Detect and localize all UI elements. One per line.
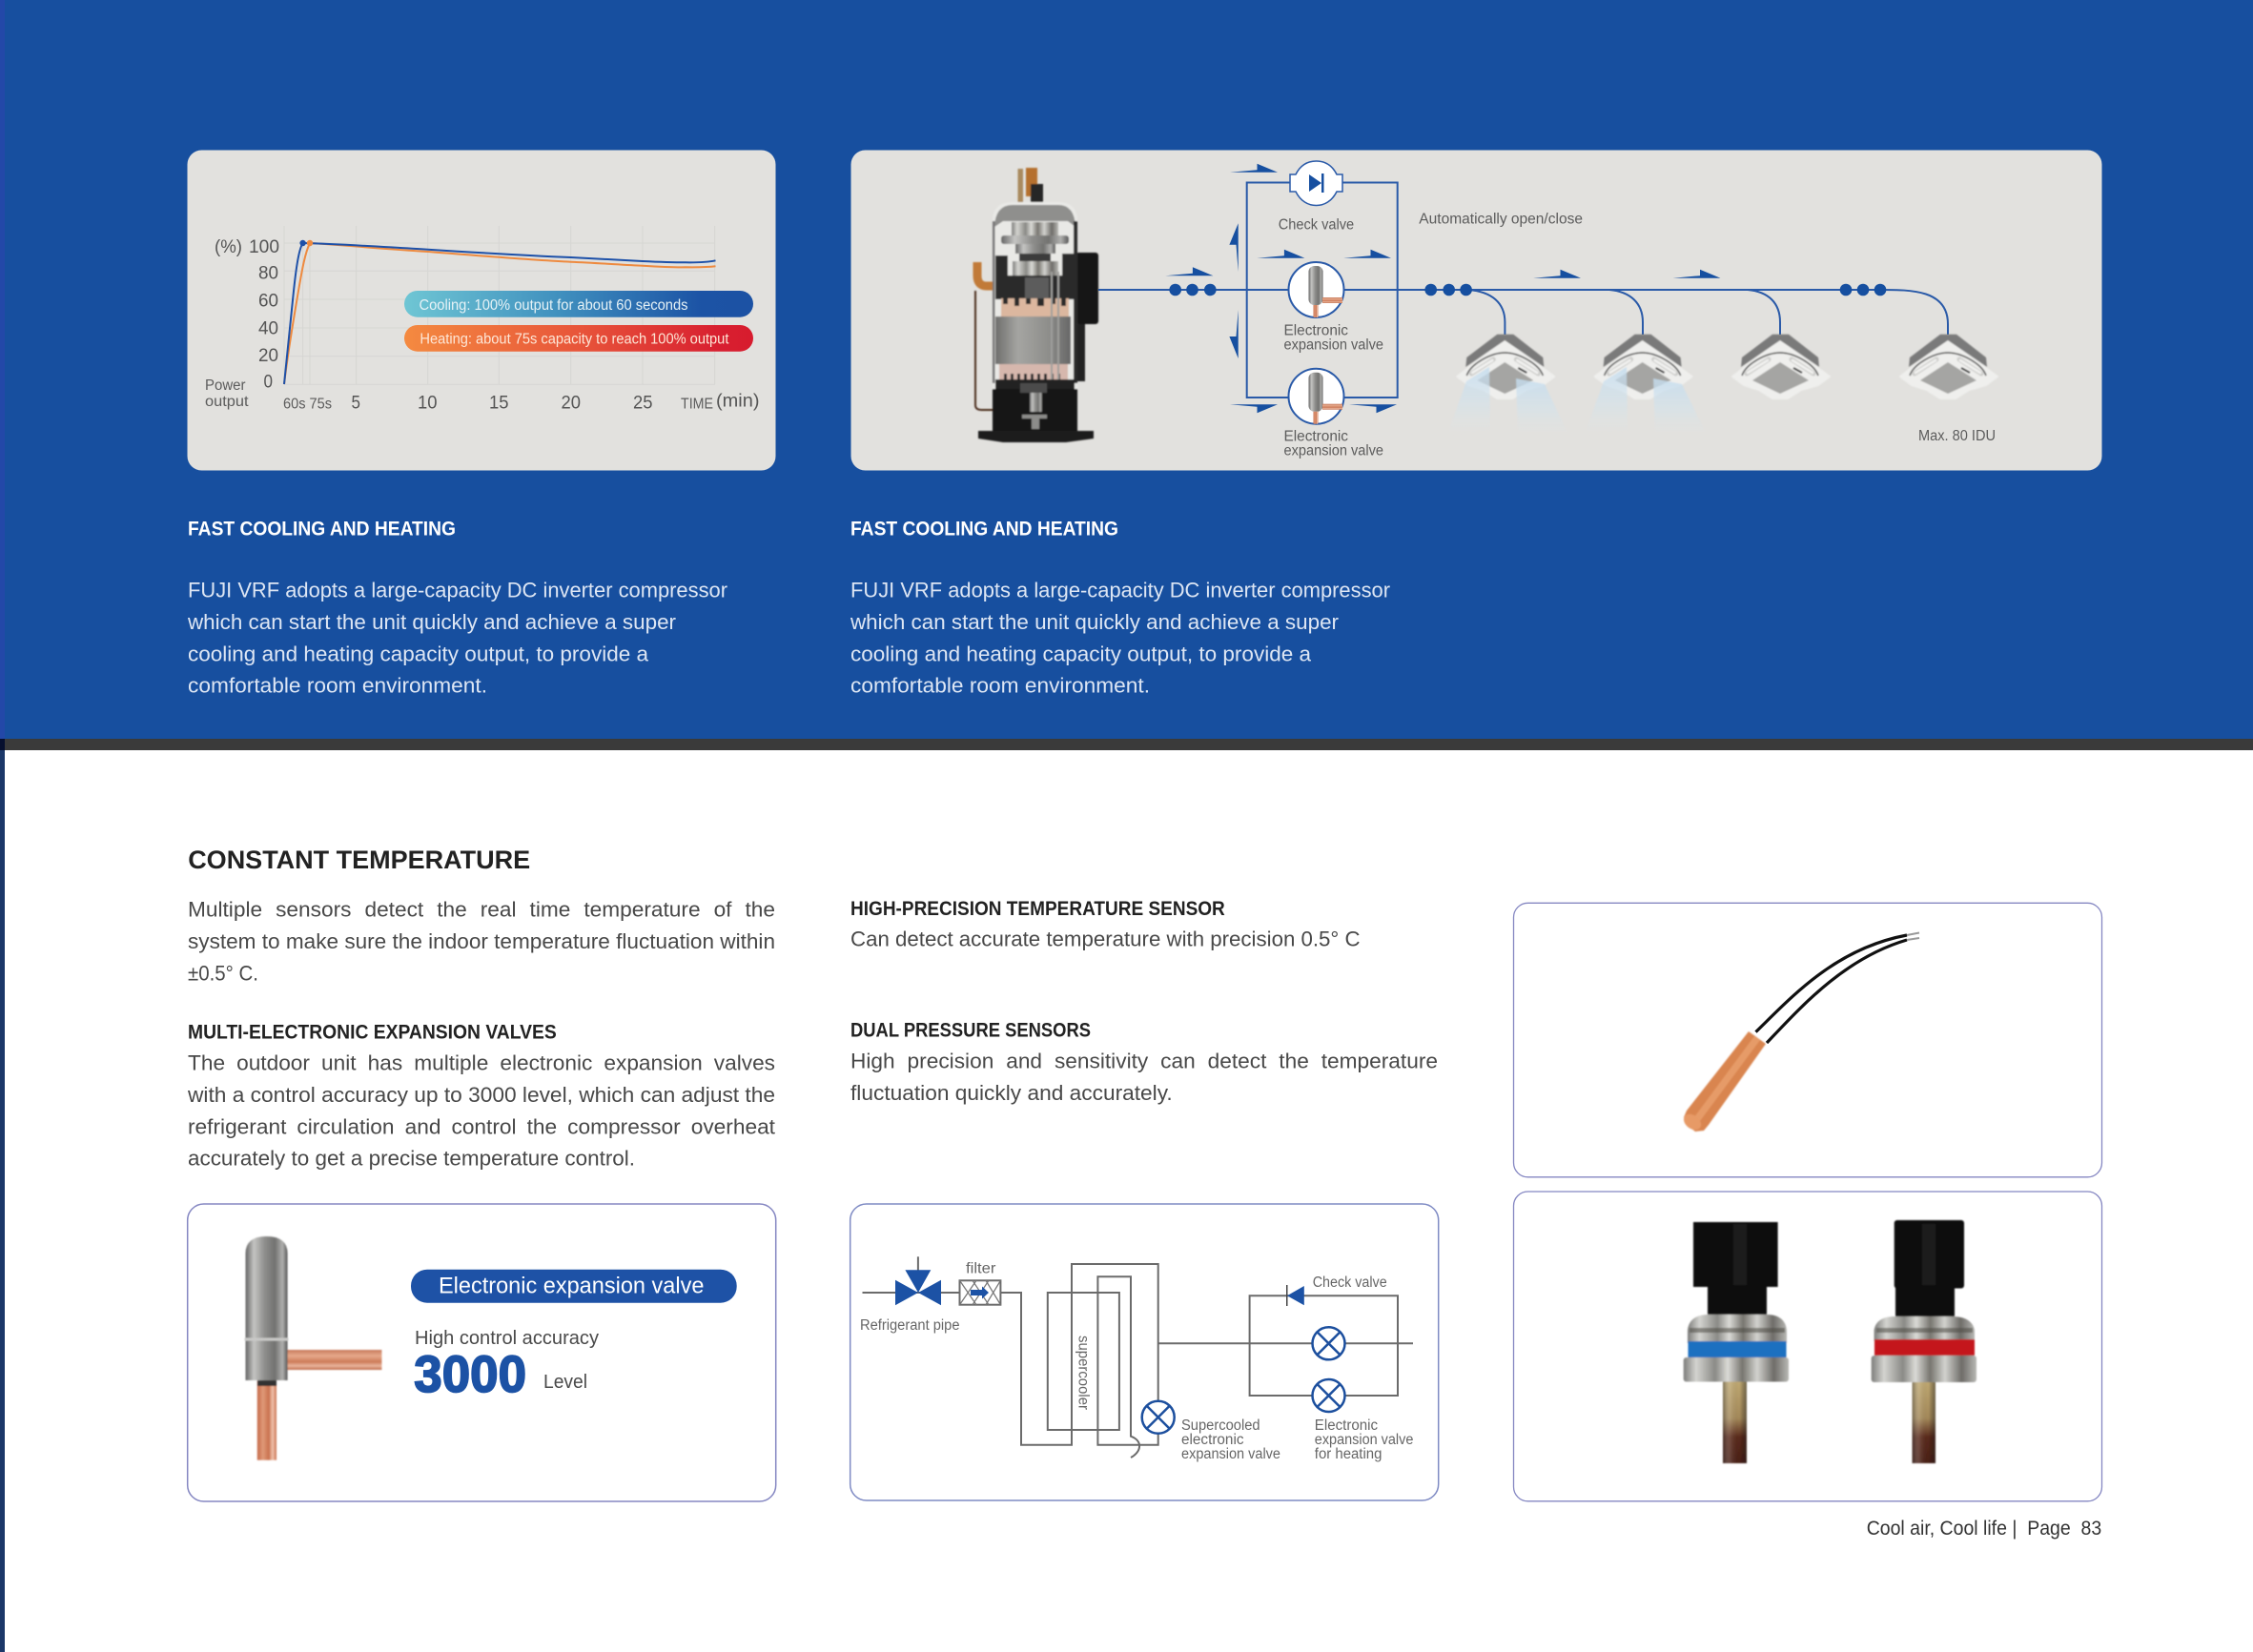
indoor unit 4	[1900, 335, 1997, 398]
text block: multi-electronic expansion valves	[187, 1021, 775, 1171]
y axis labels: 80	[258, 264, 278, 284]
axis title: power output	[205, 377, 249, 410]
icon: filter	[959, 1280, 1000, 1305]
text block: fast cooling left	[187, 519, 727, 698]
refrigerant circuit box	[1247, 183, 1398, 398]
legend: heating: Heating: about 75s capacity to reach 100% output	[420, 332, 729, 348]
text block: fast cooling left: comfortable room environment.	[188, 674, 487, 698]
x axis labels: 5	[351, 393, 360, 413]
background: blue section	[0, 0, 2253, 739]
x axis labels: (min)	[716, 391, 759, 412]
text block: fast cooling left: FUJI VRF adopts a large-capacity DC inverter compressor	[188, 579, 727, 602]
indoor unit 1	[1457, 335, 1554, 398]
accuracy text	[414, 1327, 600, 1403]
icon: electronic expansion valve upper	[1289, 262, 1344, 317]
x axis labels: 60s 75s	[283, 396, 332, 412]
panel: refrigerant schematic	[850, 1204, 1439, 1500]
diagram labels: expansion valve	[1283, 337, 1383, 354]
y axis labels: 0	[263, 373, 273, 393]
valve photo	[244, 1236, 381, 1460]
schematic labels: supercooler	[1075, 1336, 1091, 1410]
left edge strip	[0, 0, 5, 1652]
label pill: Electronic expansion valve	[439, 1274, 704, 1299]
schematic labels: expansion valve	[1315, 1432, 1413, 1448]
legend: cooling: Cooling: 100% output for about 60 seconds	[420, 297, 688, 314]
text block: fast cooling right: FAST COOLING AND HEATING	[850, 519, 1118, 540]
x axis labels: TIME	[681, 396, 713, 412]
y axis labels: (%)	[215, 237, 242, 257]
footer: page number: Cool air, Cool life | Page 83	[1867, 1518, 2101, 1540]
x axis labels: 15	[489, 393, 509, 413]
low-pressure sensor, blue band	[1684, 1222, 1789, 1463]
heating curve	[284, 243, 715, 384]
text block: fast cooling right: FUJI VRF adopts a large-capacity DC inverter compressor	[850, 579, 1390, 602]
legend: heating	[404, 325, 753, 352]
sensor wires	[1756, 935, 1907, 1043]
icon: check valve	[1286, 1285, 1304, 1306]
text block: fast cooling left: FAST COOLING AND HEATING	[188, 519, 456, 540]
schematic labels: Electronic	[1315, 1417, 1378, 1434]
text block: constant temperature intro	[188, 898, 775, 985]
panel: compressor and indoor units diagram	[850, 151, 2101, 471]
airflow from indoor units	[1447, 367, 1707, 435]
panel: power output chart	[187, 151, 776, 471]
y axis labels: 60	[258, 292, 278, 312]
peak markers	[299, 240, 313, 246]
schematic labels: for heating	[1315, 1446, 1382, 1462]
diagram labels	[1279, 211, 1996, 459]
text block: high-precision temperature sensor: Can detect accurate temperature with precision 0.5° C	[850, 928, 1361, 951]
text block: multi-electronic expansion valves: refrigerant circulation and control the compressor overheat	[188, 1114, 775, 1138]
x axis labels: 25	[633, 393, 652, 413]
branch pipes	[1468, 290, 1780, 335]
main pipe	[1098, 290, 1948, 335]
indoor unit 2	[1595, 335, 1692, 398]
x axis labels: 10	[418, 393, 437, 413]
text block: multi-electronic expansion valves: The outdoor unit has multiple electronic expansion valves	[188, 1051, 775, 1075]
text block: fast cooling right: cooling and heating capacity output, to provide a	[850, 642, 1312, 665]
text block: multi-electronic expansion valves: with a control accuracy up to 3000 level, which can adjust the	[187, 1083, 775, 1107]
text block: constant temperature intro: system to make sure the indoor temperature fluctuation within	[188, 929, 775, 953]
diagram labels: Automatically open/close	[1419, 211, 1583, 227]
diagram labels: Electronic	[1283, 323, 1348, 339]
x axis labels	[283, 391, 759, 413]
text block: high-precision temperature sensor: HIGH-PRECISION TEMPERATURE SENSOR	[850, 898, 1225, 920]
icon: three-way valve	[895, 1270, 941, 1305]
diagram labels: expansion valve	[1283, 442, 1383, 459]
compressor cutaway	[975, 168, 1098, 442]
text block: constant temperature intro: ±0.5° C.	[188, 961, 258, 985]
accuracy text: 3000	[414, 1346, 526, 1403]
icon: supercooled expansion valve	[1142, 1401, 1175, 1434]
axis title: power output: Power	[205, 377, 246, 394]
diagram labels: Check valve	[1279, 217, 1354, 234]
panel: pressure sensors	[1514, 1192, 2101, 1501]
axis title: power output: output	[205, 394, 249, 410]
icon: electronic expansion valve lower	[1289, 369, 1344, 424]
text block: dual pressure sensors: fluctuation quickly and accurately.	[850, 1081, 1173, 1105]
text block: multi-electronic expansion valves: MULTI-ELECTRONIC EXPANSION VALVES	[188, 1021, 557, 1043]
pipes	[862, 1256, 1413, 1458]
copper probe	[1681, 1031, 1766, 1133]
schematic labels: Refrigerant pipe	[860, 1317, 959, 1334]
y axis labels: 40	[258, 319, 278, 339]
icon: check valve	[1290, 161, 1342, 206]
wire tips	[1907, 932, 1919, 940]
text block: fast cooling left: which can start the unit quickly and achieve a super	[187, 610, 676, 634]
legend: cooling	[404, 291, 753, 317]
text block: constant temperature intro: Multiple sensors detect the real time temperature of the	[188, 898, 775, 922]
icon: expansion valve upper	[1312, 1327, 1344, 1359]
schematic labels: electronic	[1181, 1432, 1244, 1448]
schematic labels: filter	[966, 1261, 995, 1277]
title: constant temperature: CONSTANT TEMPERATURE	[188, 846, 530, 874]
text block: multi-electronic expansion valves: accurately to get a precise temperature control.	[188, 1147, 635, 1171]
schematic labels: expansion valve	[1181, 1446, 1280, 1462]
divider band	[0, 739, 2253, 750]
label pill	[411, 1270, 737, 1303]
text block: fast cooling left: cooling and heating capacity output, to provide a	[188, 642, 649, 665]
y axis labels	[215, 237, 279, 393]
panel: temperature sensor	[1514, 903, 2101, 1177]
diagram labels: Max. 80 IDU	[1918, 428, 1996, 444]
y axis labels: 100	[249, 237, 279, 257]
x axis labels: 20	[561, 393, 581, 413]
diagram labels: Electronic	[1283, 429, 1348, 445]
schematic labels: Check valve	[1313, 1275, 1387, 1291]
high-pressure sensor, red band	[1872, 1220, 1976, 1463]
text block: fast cooling right: comfortable room environment.	[850, 674, 1150, 698]
panel: electronic expansion valve	[188, 1204, 776, 1501]
text block: fast cooling right	[850, 519, 1390, 698]
schematic labels	[860, 1261, 1413, 1462]
dots: pipe continuation	[1169, 284, 1886, 296]
chart grid	[284, 226, 715, 384]
y axis labels: 20	[258, 346, 278, 366]
text block: dual pressure sensors: High precision and sensitivity can detect the temperature	[850, 1050, 1438, 1073]
accuracy text: Level	[543, 1372, 587, 1393]
schematic labels: Supercooled	[1181, 1417, 1260, 1434]
text block: high-precision temperature sensor	[850, 898, 1361, 951]
text block: fast cooling right: which can start the unit quickly and achieve a super	[850, 610, 1339, 634]
text block: dual pressure sensors: DUAL PRESSURE SENSORS	[850, 1019, 1091, 1041]
icon: expansion valve lower	[1312, 1379, 1344, 1412]
indoor unit 3	[1732, 335, 1830, 398]
flow arrows	[1165, 164, 1720, 413]
accuracy text: High control accuracy	[415, 1327, 600, 1349]
cooling curve	[284, 243, 715, 384]
text block: dual pressure sensors	[850, 1019, 1438, 1105]
